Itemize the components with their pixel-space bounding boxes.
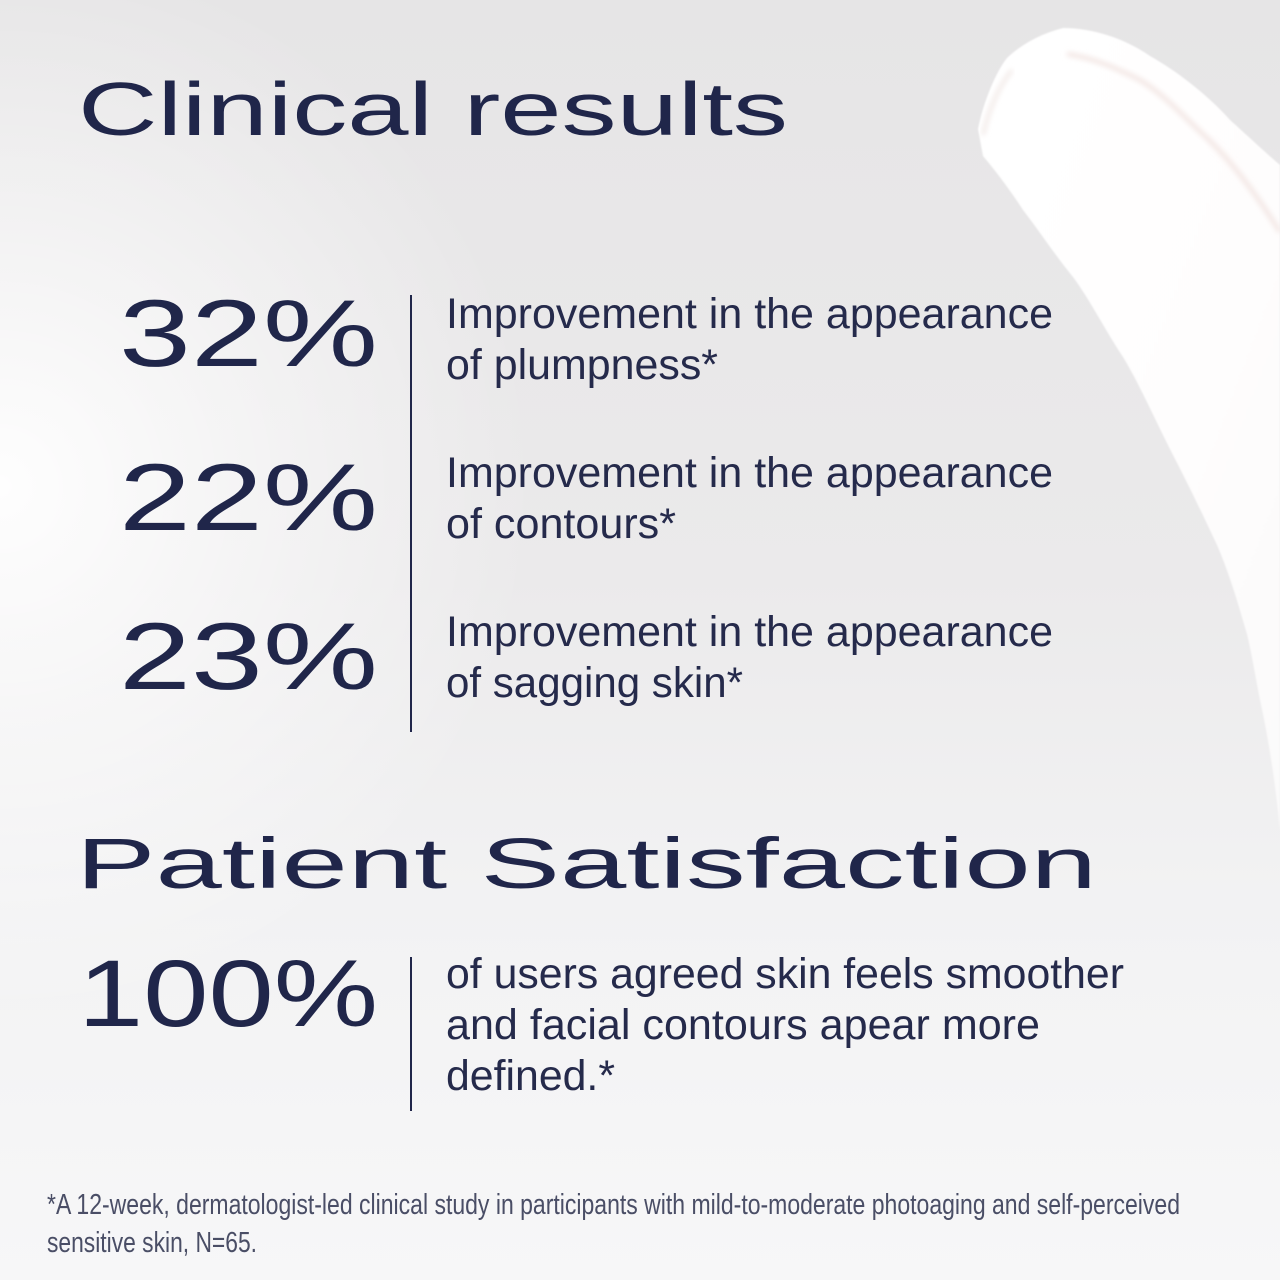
stat: 23% sagging skin: of sagging skin* [446,659,743,707]
cream swoosh [978,28,1280,830]
stat: 32% plumpness: of plumpness* [446,341,718,389]
stat: 32% plumpness: Improvement in the appearance [446,290,1053,338]
stat: 100% of users: defined.* [446,1052,615,1100]
stat: 100% of users [78,941,1124,1100]
stat: 100% of users: of users agreed skin feels smoother [446,950,1124,998]
stat: 22% contours: Improvement in the appearance [446,449,1053,497]
stat: 23% sagging skin: 23% [119,604,378,710]
stat: 32% plumpness [119,281,1053,389]
footnote: sensitive skin, N=65. [47,1227,257,1259]
stat: 22% contours: of contours* [446,500,676,548]
divider: clinical results [410,295,412,732]
stat: 100% of users: 100% [78,941,378,1047]
stat: 23% sagging skin [119,604,1053,710]
stat: 22% contours: 22% [119,445,378,551]
heading: Patient Satisfaction: Patient Satisfaction [76,825,1097,904]
divider: patient satisfaction [410,957,412,1111]
stat: 22% contours [119,445,1053,551]
footnote [47,1189,1180,1259]
stat: 100% of users: and facial contours apear more [446,1001,1040,1049]
stat: 32% plumpness: 32% [119,281,378,387]
title: Clinical results: Clinical results [78,67,788,151]
stat: 23% sagging skin: Improvement in the appearance [446,608,1053,656]
